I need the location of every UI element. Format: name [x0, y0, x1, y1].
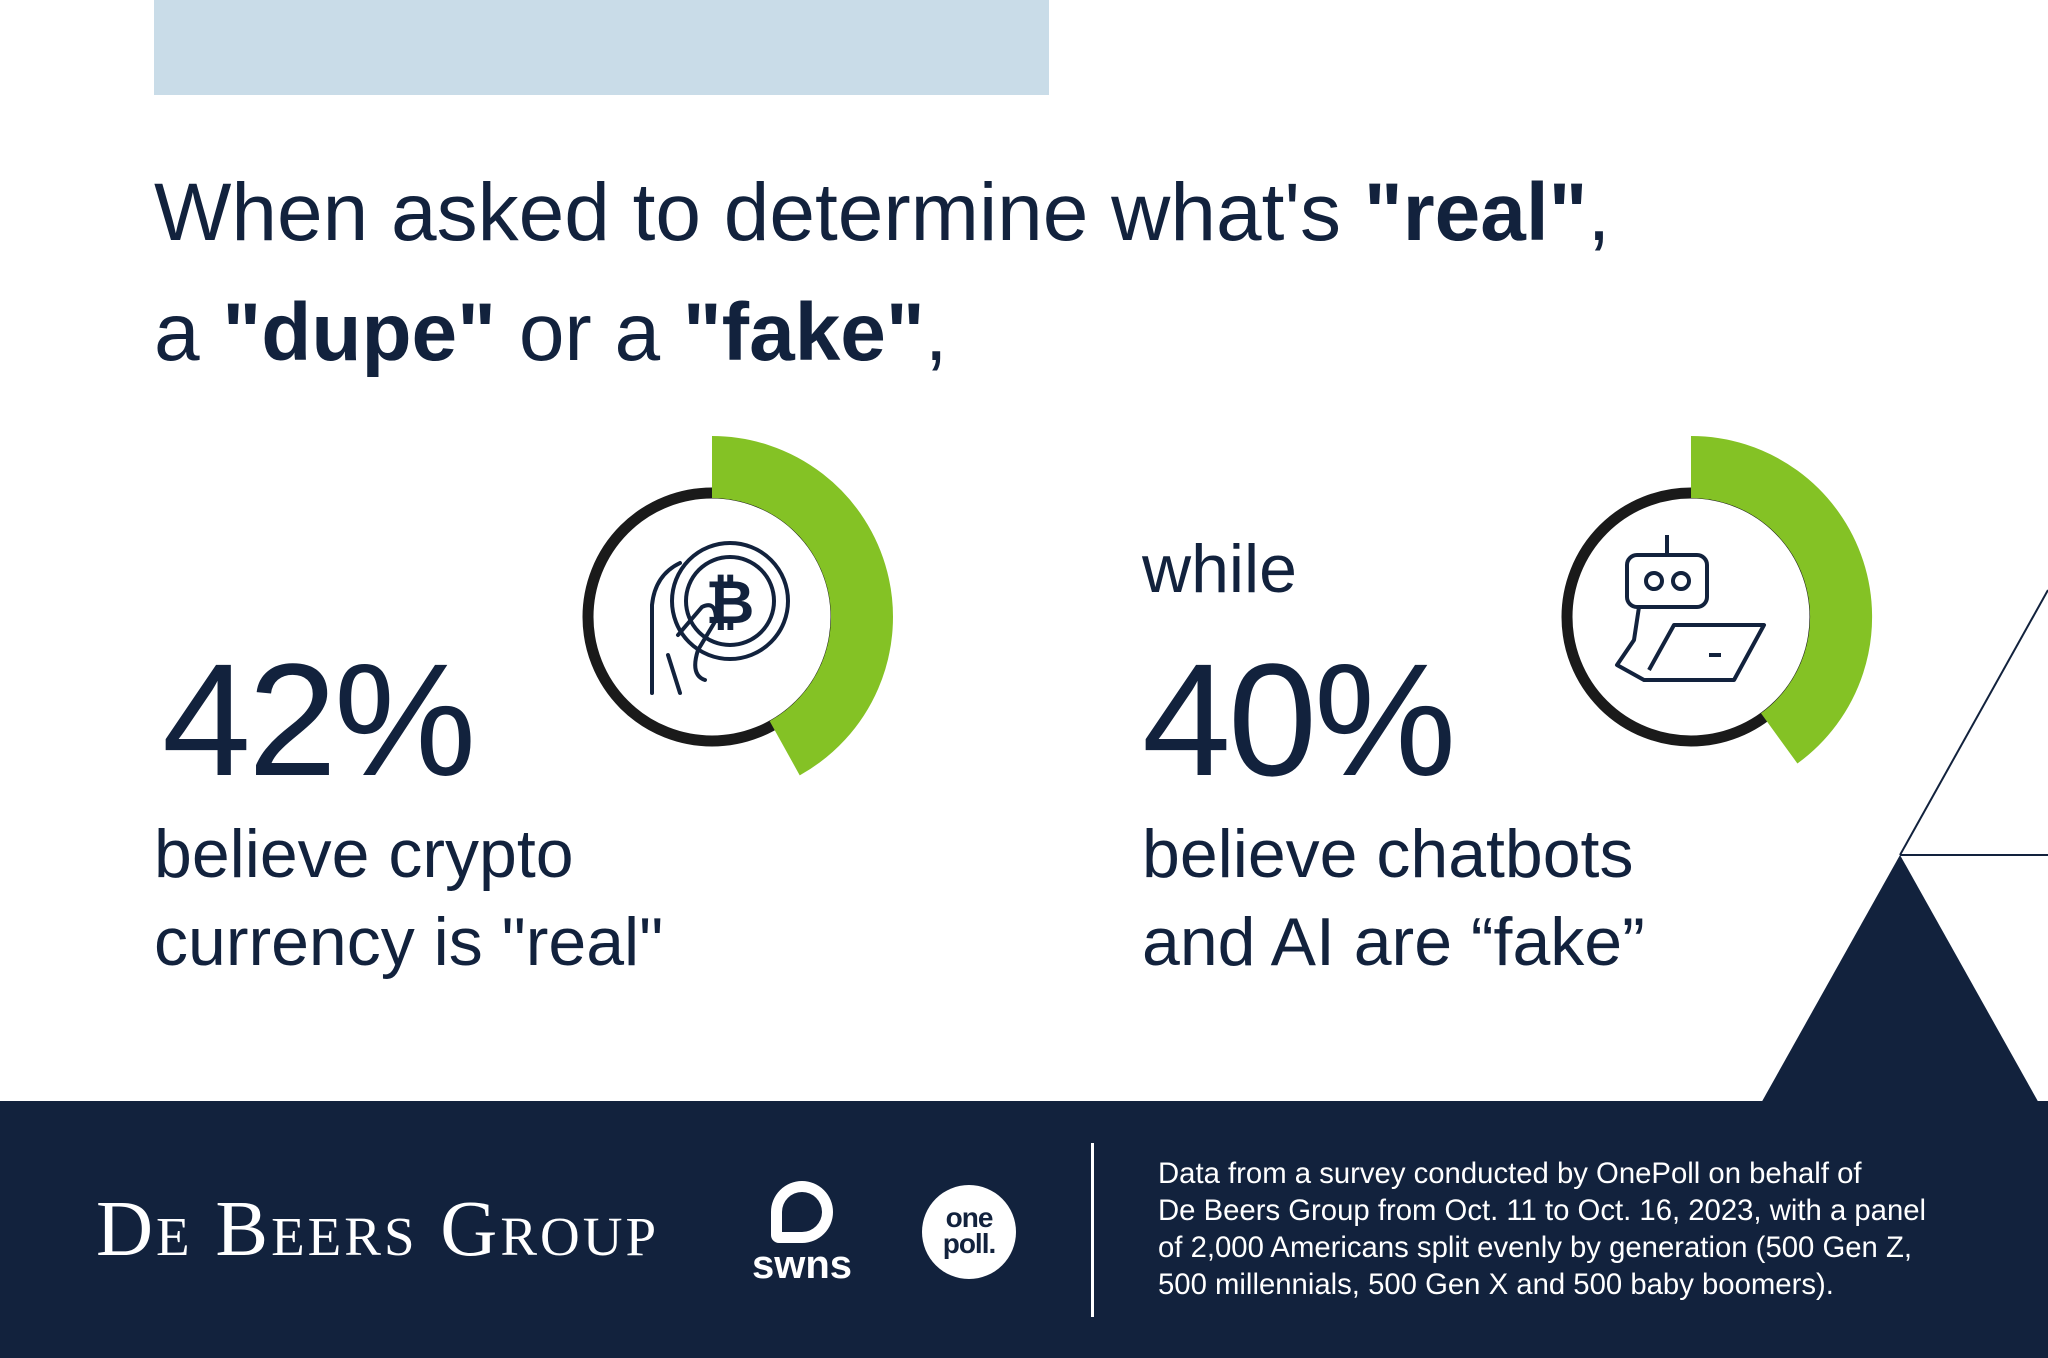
- footer: [0, 1101, 2048, 1358]
- text: chatbots: believe chatbots: [1142, 816, 1633, 892]
- logo: De Beers Group: De Beers Group: [96, 1186, 659, 1273]
- stat: 40%: 40%: [1142, 630, 1453, 809]
- text: crypto: believe crypto: [154, 816, 574, 892]
- title: a "dupe" or a "fake",: [154, 287, 948, 378]
- icon: bitcoin hand: [652, 543, 788, 693]
- source text: Data from a survey conducted by OnePoll on behalf of: [1158, 1157, 1862, 1190]
- icon: bitcoin hand: ₿: [706, 569, 754, 636]
- icon: robot laptop: [1617, 535, 1764, 680]
- donut: crypto 42%: [582, 436, 893, 776]
- text: chatbots: [1142, 816, 1645, 980]
- text: crypto: currency is "real": [154, 904, 663, 980]
- divider: [1091, 1143, 1094, 1317]
- source text: 500 millennials, 500 Gen X and 500 baby boomers).: [1158, 1268, 1834, 1301]
- text: crypto: [154, 816, 663, 980]
- top bar: [154, 0, 1049, 95]
- logo: swns: [752, 1181, 852, 1287]
- logo: onepoll: one: [946, 1202, 992, 1233]
- logo: swns: swns: [752, 1243, 852, 1287]
- logo: onepoll: poll.: [943, 1228, 995, 1259]
- donut: chatbots 40%: [1562, 436, 1872, 764]
- stat: 42%: 42%: [162, 630, 473, 809]
- title: [154, 167, 1610, 378]
- decorative triangle: [1762, 590, 2048, 1101]
- source text: of 2,000 Americans split evenly by generation (500 Gen Z,: [1158, 1231, 1912, 1264]
- title: When asked to determine what's "real",: [154, 167, 1610, 258]
- text: while: while: [1142, 531, 1297, 607]
- text: chatbots: and AI are “fake”: [1142, 904, 1645, 980]
- source text: De Beers Group from Oct. 11 to Oct. 16, 2023, with a panel: [1158, 1194, 1926, 1227]
- logo: onepoll: [922, 1185, 1016, 1279]
- source text: [1158, 1157, 1926, 1301]
